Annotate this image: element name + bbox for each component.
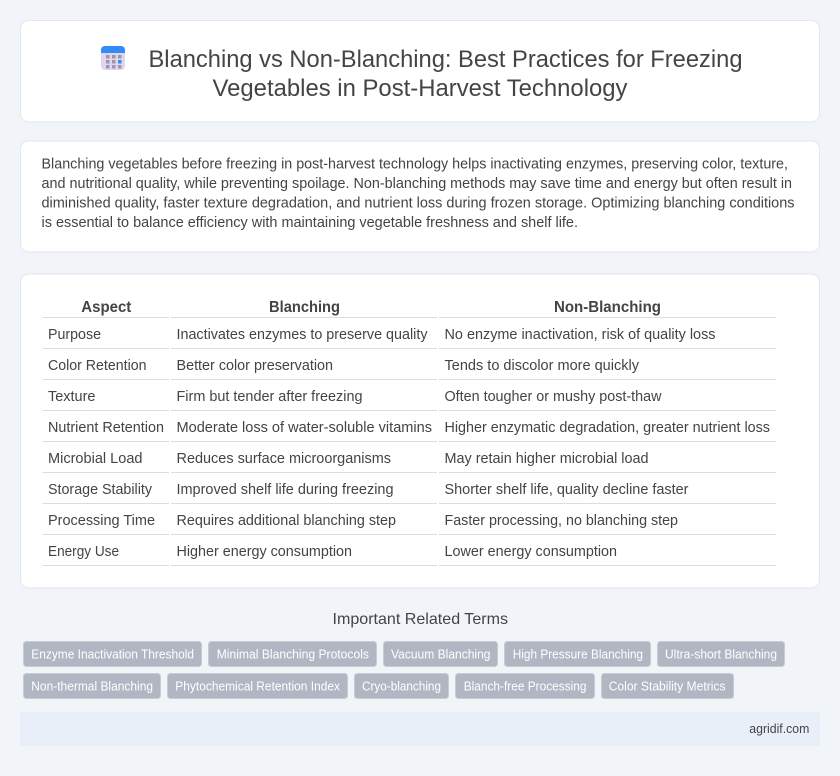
footer bar: agridif.com xyxy=(749,721,809,736)
intro paragraph: Blanching vegetables before freezing in post-harvest technology helps inactivating enzymes, preserving color, texture, xyxy=(42,156,788,172)
row: texture: Texture xyxy=(48,389,96,405)
row: color retention xyxy=(48,358,640,374)
row: energy use: Lower energy consumption xyxy=(444,544,617,560)
tag: Phytochemical Retention Index xyxy=(175,678,340,693)
row: storage stability: Improved shelf life during freezing xyxy=(176,482,394,498)
row: storage stability: Storage Stability xyxy=(48,482,153,498)
tag xyxy=(602,674,734,698)
row: processing time: Processing Time xyxy=(48,513,155,529)
row: nutrient retention: Moderate loss of water-soluble vitamins xyxy=(176,420,432,436)
table header: Non-Blanching xyxy=(554,299,661,316)
tag xyxy=(168,674,348,698)
tag: Ultra-short Blanching xyxy=(665,646,777,661)
row: nutrient retention: Higher enzymatic degradation, greater nutrient loss xyxy=(444,420,770,436)
row: texture xyxy=(48,389,662,405)
tag: Color Stability Metrics xyxy=(609,678,726,693)
tag xyxy=(354,674,448,698)
tag: Minimal Blanching Protocols xyxy=(217,646,369,661)
tag xyxy=(658,642,784,666)
panel: comparison table xyxy=(20,274,820,588)
tag xyxy=(384,642,498,666)
row: purpose: Inactivates enzymes to preserve quality xyxy=(176,327,428,343)
title xyxy=(148,46,742,102)
table header: Aspect xyxy=(81,299,132,316)
tag: Non-thermal Blanching xyxy=(31,678,153,693)
tag: Vacuum Blanching xyxy=(391,646,490,661)
tag xyxy=(504,642,650,666)
tag: Enzyme Inactivation Threshold xyxy=(31,646,194,661)
tag xyxy=(24,642,202,666)
row: purpose: Purpose xyxy=(48,327,101,343)
tag: High Pressure Blanching xyxy=(513,646,643,661)
intro paragraph: is essential to balance efficiency with maintaining vegetable freshness and shelf life. xyxy=(42,215,578,231)
title: Blanching vs Non-Blanching: Best Practices for Freezing xyxy=(148,46,742,73)
intro paragraph: diminished quality, faster texture degradation, and nutrient loss during frozen storage. Optimizing blanching conditions xyxy=(42,196,794,212)
table header xyxy=(81,299,661,316)
tag xyxy=(456,674,594,698)
row: purpose xyxy=(48,327,716,343)
intro paragraph xyxy=(42,156,794,231)
intro paragraph: and nutritional quality, while preventing spoilage. Non-blanching methods may save time and energy but often result in xyxy=(42,176,792,192)
row: color retention: Better color preservation xyxy=(176,358,333,374)
row: energy use: Energy Use xyxy=(48,544,119,560)
table header: Blanching xyxy=(269,299,340,316)
row: storage stability xyxy=(48,482,689,498)
footer bar xyxy=(20,712,820,746)
panel: introduction xyxy=(20,141,820,252)
row: microbial load: Reduces surface microorganisms xyxy=(176,451,391,467)
row: energy use: Higher energy consumption xyxy=(176,544,352,560)
tag: Blanch-free Processing xyxy=(464,678,586,693)
row: energy use xyxy=(48,544,617,560)
row: microbial load: Microbial Load xyxy=(48,451,142,467)
row: texture: Often tougher or mushy post-thaw xyxy=(444,389,662,405)
row: color retention: Color Retention xyxy=(48,358,146,374)
icon: calendar grid xyxy=(101,46,125,70)
row: processing time: Faster processing, no blanching step xyxy=(444,513,678,529)
tag xyxy=(208,642,376,666)
row: purpose: No enzyme inactivation, risk of quality loss xyxy=(444,327,716,343)
tag cloud xyxy=(24,642,784,698)
panel: title card xyxy=(20,20,820,122)
heading: important related terms: Important Related Terms xyxy=(332,611,508,628)
row: storage stability: Shorter shelf life, quality decline faster xyxy=(444,482,689,498)
row: microbial load xyxy=(48,451,648,467)
tag: Cryo-blanching xyxy=(362,678,441,693)
row: microbial load: May retain higher microbial load xyxy=(444,451,648,467)
row: processing time: Requires additional blanching step xyxy=(176,513,396,529)
tag xyxy=(24,674,160,698)
row: texture: Firm but tender after freezing xyxy=(176,389,362,405)
row: nutrient retention: Nutrient Retention xyxy=(48,420,164,436)
title: Vegetables in Post-Harvest Technology xyxy=(212,75,628,102)
row: color retention: Tends to discolor more quickly xyxy=(444,358,640,374)
row: nutrient retention xyxy=(48,420,770,436)
row: processing time xyxy=(48,513,678,529)
